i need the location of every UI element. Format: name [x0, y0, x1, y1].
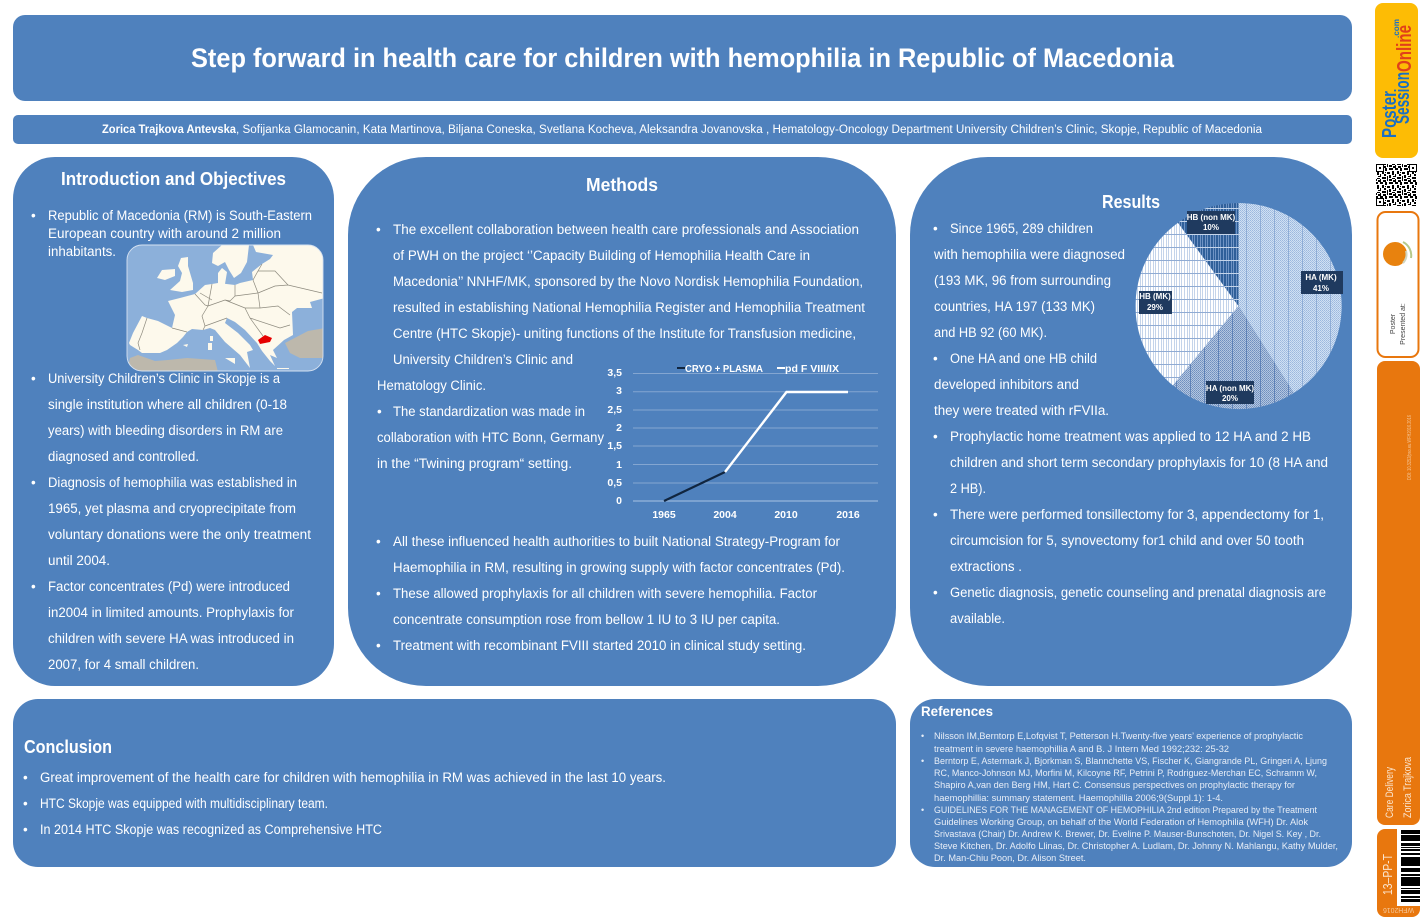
references list: GUIDELINES FOR THE MANAGEMENT OF HEMOPHILIA 2nd edition Prepared by the Treatment	[934, 805, 1317, 815]
conclusion text: •	[23, 796, 28, 811]
references list: •	[921, 731, 924, 741]
methods text lower: •	[376, 638, 381, 653]
references list: Guidelines Working Group, on behalf of the World Federation of Hemophilia (WFH) Dr. Alok	[934, 817, 1309, 827]
y axis labels: 0	[616, 495, 622, 507]
methods text upper: •	[376, 222, 381, 237]
references list: Steve Kitchen, Dr. Adolfo Llinas, Dr. Christopher A. Ludlam, Dr. Johnny N. Mahlangu, Kathy Mulder,	[934, 841, 1338, 851]
results text: •	[933, 585, 938, 600]
panel: references	[910, 699, 1352, 867]
methods text lower: All these influenced health authorities to built National Strategy-Program for	[393, 534, 840, 549]
label: HB MK: 29%	[1147, 303, 1163, 312]
results text: •	[933, 221, 938, 236]
references list: Nilsson IM,Berntorp E,Lofqvist T, Petterson H.Twenty-five years’ experience of prophylactic	[934, 731, 1303, 741]
methods text upper: collaboration with HTC Bonn, Germany	[377, 430, 604, 445]
heading: introduction: Introduction and Objectives	[61, 169, 286, 189]
conclusion text: In 2014 HTC Skopje was recognized as Comprehensive HTC	[40, 822, 382, 837]
references list: haemophillia: summary statement. Haemophillia 2006;9(Suppl.1): 1-4.	[934, 793, 1223, 803]
panel: conclusion	[13, 699, 896, 867]
methods text upper: •	[377, 404, 382, 419]
label: HB MK	[1139, 291, 1172, 314]
chart legend: pd F VIII/IX	[785, 363, 839, 375]
x axis labels	[652, 509, 860, 521]
DOI: DOI: 10.3252/pso.eu.WFH2016.2016	[1407, 415, 1413, 480]
sidebar: PosterSessionOnline logo: .com	[1392, 19, 1401, 38]
presented at text	[1390, 303, 1407, 345]
presented at text: Presented at:	[1400, 303, 1407, 345]
panel: results	[910, 157, 1352, 686]
poster number: 13–PP-T	[1380, 854, 1395, 895]
methods text lower: Treatment with recombinant FVIII started 2010 in clinical study setting.	[393, 638, 806, 653]
chart legend: CRYO + PLASMA	[685, 363, 763, 375]
introduction text: inhabitants.	[48, 244, 116, 259]
introduction text: 1965, yet plasma and cryoprecipitate from	[48, 501, 296, 516]
methods text upper: The standardization was made in	[393, 404, 585, 419]
references list	[921, 731, 1338, 863]
references list: •	[921, 805, 924, 815]
results text: countries, HA 197 (133 MK)	[934, 299, 1095, 314]
label: HA non MK: 20%	[1222, 394, 1238, 403]
methods text upper: Centre (HTC Skopje)- uniting functions of the Institute for Transfusion medicine,	[393, 326, 856, 341]
category and author	[1384, 756, 1414, 818]
results text: developed inhibitors and	[934, 377, 1079, 392]
label: HA MK: 41%	[1313, 284, 1329, 293]
panel: introduction and objectives	[13, 157, 334, 686]
results text: and HB 92 (60 MK).	[934, 325, 1047, 340]
map of Europe with Macedonia highlighted	[127, 245, 325, 372]
results text: 2 HB).	[950, 481, 986, 496]
results text: Genetic diagnosis, genetic counseling and prenatal diagnosis are	[950, 585, 1326, 600]
methods text lower: Haemophilia in RM, resulting in growing supply with factor concentrates (Pd).	[393, 560, 845, 575]
sidebar: PosterSessionOnline logo: Online	[1394, 25, 1416, 72]
introduction text: in2004 in limited amounts. Prophylaxis for	[48, 605, 294, 620]
results text: with hemophilia were diagnosed	[933, 247, 1125, 262]
sidebar: orange details strip	[1377, 361, 1420, 825]
methods text upper: in the “Twining program“ setting.	[377, 456, 572, 471]
congress tag: WFH2016	[1383, 906, 1414, 913]
y axis labels: 1,5	[607, 440, 622, 452]
methods text lower: •	[376, 534, 381, 549]
results text: Since 1965, 289 children	[950, 221, 1093, 236]
introduction text: University Children’s Clinic in Skopje is a	[48, 371, 280, 386]
conclusion text	[23, 770, 666, 837]
heading: conclusion: Conclusion	[24, 737, 112, 757]
category and author: Care Delivery	[1384, 767, 1396, 818]
results text: •	[933, 351, 938, 366]
x axis labels: 1965	[652, 509, 676, 521]
panel: methods	[348, 157, 896, 686]
methods text upper: Hematology Clinic.	[377, 378, 486, 393]
introduction text: •	[31, 579, 36, 594]
results text: children and short term secondary prophylaxis for 10 (8 HA and	[950, 455, 1328, 470]
methods text upper: Macedonia’’ NNHF/MK, sponsored by the Novo Nordisk Hemophilia Foundation,	[393, 274, 863, 289]
introduction text: •	[31, 371, 36, 386]
methods text upper: University Children’s Clinic and	[393, 352, 573, 367]
y axis labels: 2,5	[607, 404, 622, 416]
introduction text: 2007, for 4 small children.	[48, 657, 199, 672]
heading: results: Results	[1102, 192, 1160, 212]
methods text upper: The excellent collaboration between health care professionals and Association	[393, 222, 859, 237]
conclusion text: HTC Skopje was equipped with multidisciplinary team.	[40, 796, 328, 811]
label: HB non MK	[1187, 211, 1236, 234]
introduction text: •	[31, 475, 36, 490]
results text: One HA and one HB child	[950, 351, 1097, 366]
references list: Shapiro A,van den Berg HM, Hart C. Consensus perspectives on prophylactic therapy for	[934, 780, 1295, 790]
label: HA non MK	[1206, 381, 1254, 404]
introduction text: children with severe HA was introduced in	[48, 631, 294, 646]
series: pd F VIII/IX	[725, 392, 848, 472]
y axis labels: 3	[616, 385, 622, 397]
line chart: factor consumption	[607, 363, 878, 521]
methods text upper	[376, 222, 865, 471]
methods text lower: •	[376, 586, 381, 601]
y axis labels: 2	[616, 422, 622, 434]
y axis labels: 0,5	[607, 477, 622, 489]
introduction text: single institution where all children (0-18	[48, 397, 287, 412]
references list: •	[921, 756, 924, 766]
x axis labels: 2016	[836, 509, 860, 521]
methods text lower: concentrate consumption rose from bellow 1 IU to 3 IU per capita.	[393, 612, 780, 627]
heading: references: References	[921, 703, 993, 719]
sidebar: PosterSessionOnline logo	[1375, 3, 1418, 158]
references list: Srivastava (Chair) Dr. Andrew K. Brewer, Dr. Eveline P. Mauser-Bunschoten, Dr. Nigel S. Key , Dr.	[934, 829, 1321, 839]
methods text upper: resulted in establishing National Hemophilia Register and Hemophilia Treatment	[393, 300, 865, 315]
results text: (193 MK, 96 from surrounding	[934, 273, 1111, 288]
references list: Berntorp E, Astermark J, Bjorkman S, Blannchette VS, Fischer K, Giangrande PL, Gringeri A, Ljung	[934, 756, 1327, 766]
label: HB MK: HB (MK)	[1139, 292, 1171, 301]
label: HA MK	[1301, 271, 1343, 294]
category and author: Zorica Trajkova	[1402, 756, 1414, 818]
results text: Prophylactic home treatment was applied to 12 HA and 2 HB	[950, 429, 1311, 444]
sidebar: poster ID and barcode	[1377, 829, 1421, 917]
introduction text: voluntary donations were the only treatment	[48, 527, 311, 542]
heading: methods: Methods	[586, 175, 658, 195]
references list: RC, Manco-Johnson MJ, Morfini M, Kilcoyne RF, Petrini P, Rodriguez-Merchan EC, Schramm W,	[934, 768, 1317, 778]
label: HA non MK: HA (non MK)	[1206, 384, 1254, 393]
results text	[933, 221, 1328, 626]
barcode	[1401, 830, 1420, 902]
pie chart: patient distribution	[1135, 203, 1343, 409]
x axis labels: 2010	[774, 509, 798, 521]
label: HA MK: HA (MK)	[1305, 273, 1337, 282]
results text: •	[933, 429, 938, 444]
conclusion text: Great improvement of the health care for children with hemophilia in RM was achieved in the last 10 years.	[40, 770, 666, 785]
authors bar	[13, 115, 1352, 144]
references list: Dr. Man-Chiu Poon, Dr. Alison Street.	[934, 853, 1086, 863]
title: Step forward in health care for children with hemophilia in Republic of Macedonia	[191, 43, 1174, 73]
presented at text: Poster	[1390, 313, 1397, 334]
conclusion text: •	[23, 770, 28, 785]
results text: extractions .	[950, 559, 1022, 574]
label: HB non MK: HB (non MK)	[1187, 213, 1236, 222]
introduction text: diagnosed and controlled.	[48, 449, 199, 464]
sidebar: PosterSessionOnline logo: Session	[1392, 72, 1414, 124]
y axis labels: 3,5	[607, 367, 622, 379]
title banner	[13, 15, 1352, 101]
icon: congress logo	[1383, 242, 1411, 266]
introduction text: Factor concentrates (Pd) were introduced	[48, 579, 290, 594]
sidebar: presented at box	[1378, 212, 1418, 357]
authors text: , Sofijanka Glamocanin, Kata Martinova, Biljana Coneska, Svetlana Kocheva, Aleksandra Jovanovska , Hematology-Oncology Department University Children’s Clinic, Skopje, Republic of Macedonia	[236, 124, 1263, 136]
references list: treatment in severe haemophillia A and B. J Intern Med 1992;232: 25-32	[934, 744, 1229, 754]
introduction text: •	[31, 208, 36, 223]
y axis labels: 1	[616, 459, 622, 471]
sidebar: PosterSessionOnline logo: Poster	[1379, 91, 1401, 138]
methods text upper: of PWH on the project ‘’Capacity Building of Hemophilia Health Care in	[393, 248, 810, 263]
methods text lower: These allowed prophylaxis for all children with severe hemophilia. Factor	[393, 586, 817, 601]
results text: circumcision for 5, synovectomy for1 child and over 50 tooth	[950, 533, 1304, 548]
introduction text: until 2004.	[48, 553, 110, 568]
authors text: Zorica Trajkova Antevska	[102, 124, 237, 136]
results text: they were treated with rFVIIa.	[934, 403, 1109, 418]
label: HB non MK: 10%	[1203, 223, 1219, 232]
conclusion text: •	[23, 822, 28, 837]
introduction text: European country with around 2 million	[48, 226, 281, 241]
results text: There were performed tonsillectomy for 3, appendectomy for 1,	[950, 507, 1324, 522]
introduction text: Diagnosis of hemophilia was established in	[48, 475, 297, 490]
introduction text: years) with bleeding disorders in RM are	[48, 423, 283, 438]
y axis labels	[607, 367, 622, 507]
introduction text: Republic of Macedonia (RM) is South-Eastern	[48, 208, 312, 223]
x axis labels: 2004	[713, 509, 737, 521]
methods text lower	[376, 534, 845, 653]
series: cryo + plasma	[664, 472, 725, 501]
chart legend	[677, 363, 839, 375]
introduction text	[31, 208, 312, 672]
results text: •	[933, 507, 938, 522]
sidebar: QR code	[1376, 164, 1417, 206]
results text: available.	[950, 611, 1005, 626]
